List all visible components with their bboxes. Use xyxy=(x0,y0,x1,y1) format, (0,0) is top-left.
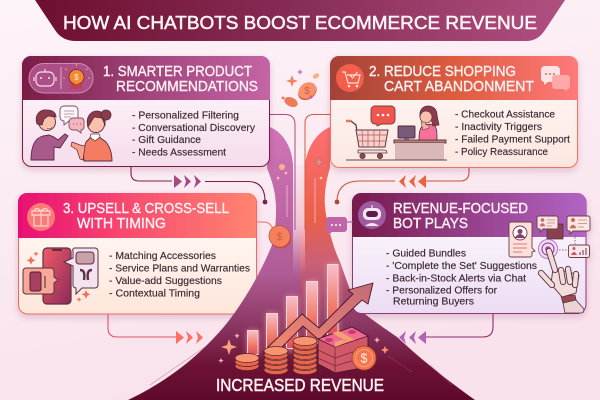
coin stacks xyxy=(235,336,317,374)
card 3 heading: WITH TIMING xyxy=(77,216,166,232)
card 4 heading: REVENUE-FOCUSED xyxy=(393,201,528,217)
card 4 bullet list: - Personalized Offers for xyxy=(386,284,497,296)
floating coins and sparkles: $ xyxy=(304,86,310,97)
central trunk: left purple side xyxy=(128,127,300,400)
card 4 header xyxy=(352,193,586,237)
sparkles around revenue xyxy=(218,333,389,363)
card 4 bullet list: Returning Buyers xyxy=(393,296,474,308)
card 2 bullet list: - Checkout Assistance xyxy=(455,108,555,120)
trunk decorations xyxy=(150,157,452,385)
card 4 bullet list xyxy=(386,248,537,308)
card 3 bullet list: - Service Plans and Warranties xyxy=(109,262,250,274)
connector: card 4 to revenue with arrows xyxy=(399,314,493,344)
card 3 heading xyxy=(63,201,229,232)
money stacks and dollar coin: $ xyxy=(361,352,368,366)
card 1 heading: 1. SMARTER PRODUCT xyxy=(103,64,252,80)
card 4 heading xyxy=(393,201,528,232)
card 1 heading: RECOMMENDATIONS xyxy=(116,79,258,95)
card 3: upsell and cross-sell panel xyxy=(18,193,256,314)
card 4 badge: robot xyxy=(358,201,386,229)
card 1 badge: robot and medal xyxy=(29,64,93,93)
card 2 heading xyxy=(369,64,534,95)
icon: coin linked to card 3 xyxy=(256,221,295,253)
card 4 heading: BOT PLAYS xyxy=(393,216,468,232)
icon: coin linked to card 3: $ xyxy=(276,231,283,243)
central light strip xyxy=(293,150,305,275)
card 1 bullet list xyxy=(132,110,256,158)
card 1 bullet list: - Needs Assessment xyxy=(132,146,226,158)
money stacks and dollar coin xyxy=(318,327,376,373)
card 4 bullet list: - 'Complete the Set' Suggestions xyxy=(386,260,537,272)
connector: card 1 to card 3 with arrows xyxy=(131,167,267,204)
card 1 bullet list: - Personalized Filtering xyxy=(132,110,239,122)
card 1 bullet list: - Gift Guidance xyxy=(132,134,201,146)
card 1: smarter product recommendations panel xyxy=(22,56,270,166)
card 3 bullet list: - Matching Accessories xyxy=(109,250,216,262)
connector: card 1 to trunk xyxy=(270,114,295,230)
card 1 badge: robot and medal: $ xyxy=(74,73,79,82)
card 2 bullet list: - Policy Reassurance xyxy=(455,146,548,158)
rising growth arrow xyxy=(263,283,373,358)
floating coins and sparkles xyxy=(282,69,320,109)
card 4 bullet list: - Guided Bundles xyxy=(386,248,466,260)
connector: card 3 to revenue with arrows xyxy=(108,314,203,344)
card 4: revenue-focused bot plays panel xyxy=(352,193,590,314)
card 2 heading: CART ABANDONMENT xyxy=(384,79,534,95)
card 2 heading: 2. REDUCE SHOPPING xyxy=(369,64,516,80)
card 1 header xyxy=(22,56,270,100)
connector: card 2 to trunk xyxy=(305,114,330,230)
card 3 illustration: phone and accessories xyxy=(23,248,98,304)
icon: chat bubble linked to card 4 xyxy=(326,217,353,235)
card 3 badge: gift icon xyxy=(27,203,55,231)
card 2 illustration: abandoned cart and worried shopper xyxy=(346,106,447,160)
card 2 badge: cart icon xyxy=(336,64,364,92)
card 3 header xyxy=(18,193,256,238)
card 1 bullet list: - Conversational Discovery xyxy=(132,122,256,134)
increased revenue label: INCREASED REVENUE xyxy=(216,375,384,395)
card 2: reduce cart abandonment panel xyxy=(330,56,578,168)
card 1 illustration: two people chatting xyxy=(31,106,112,161)
card 1 heading xyxy=(103,64,258,95)
card 2 icon: chat bubbles xyxy=(541,66,570,91)
connector: card 2 to card 4 with arrows xyxy=(335,168,469,204)
title banner xyxy=(35,0,565,41)
card 4 bullet list: - Back-in-Stock Alerts via Chat xyxy=(386,272,526,284)
revenue bar chart xyxy=(247,264,339,355)
card 4 illustration: robot hand and profile cards xyxy=(509,216,590,313)
card 2 header xyxy=(330,56,578,100)
card 3 bullet list: - Contextual Timing xyxy=(109,288,200,300)
card 2 bullet list: - Inactivity Triggers xyxy=(455,121,542,133)
title text: HOW AI CHATBOTS BOOST ECOMMERCE REVENUE xyxy=(63,12,537,33)
card 3 bullet list xyxy=(109,250,250,300)
card 2 bullet list: - Failed Payment Support xyxy=(455,134,570,146)
card 3 heading: 3. UPSELL & CROSS-SELL xyxy=(63,201,229,217)
card 2 bullet list xyxy=(455,108,570,158)
card 3 bullet list: - Value-add Suggestions xyxy=(109,275,222,287)
central trunk: right orange side xyxy=(300,127,475,400)
